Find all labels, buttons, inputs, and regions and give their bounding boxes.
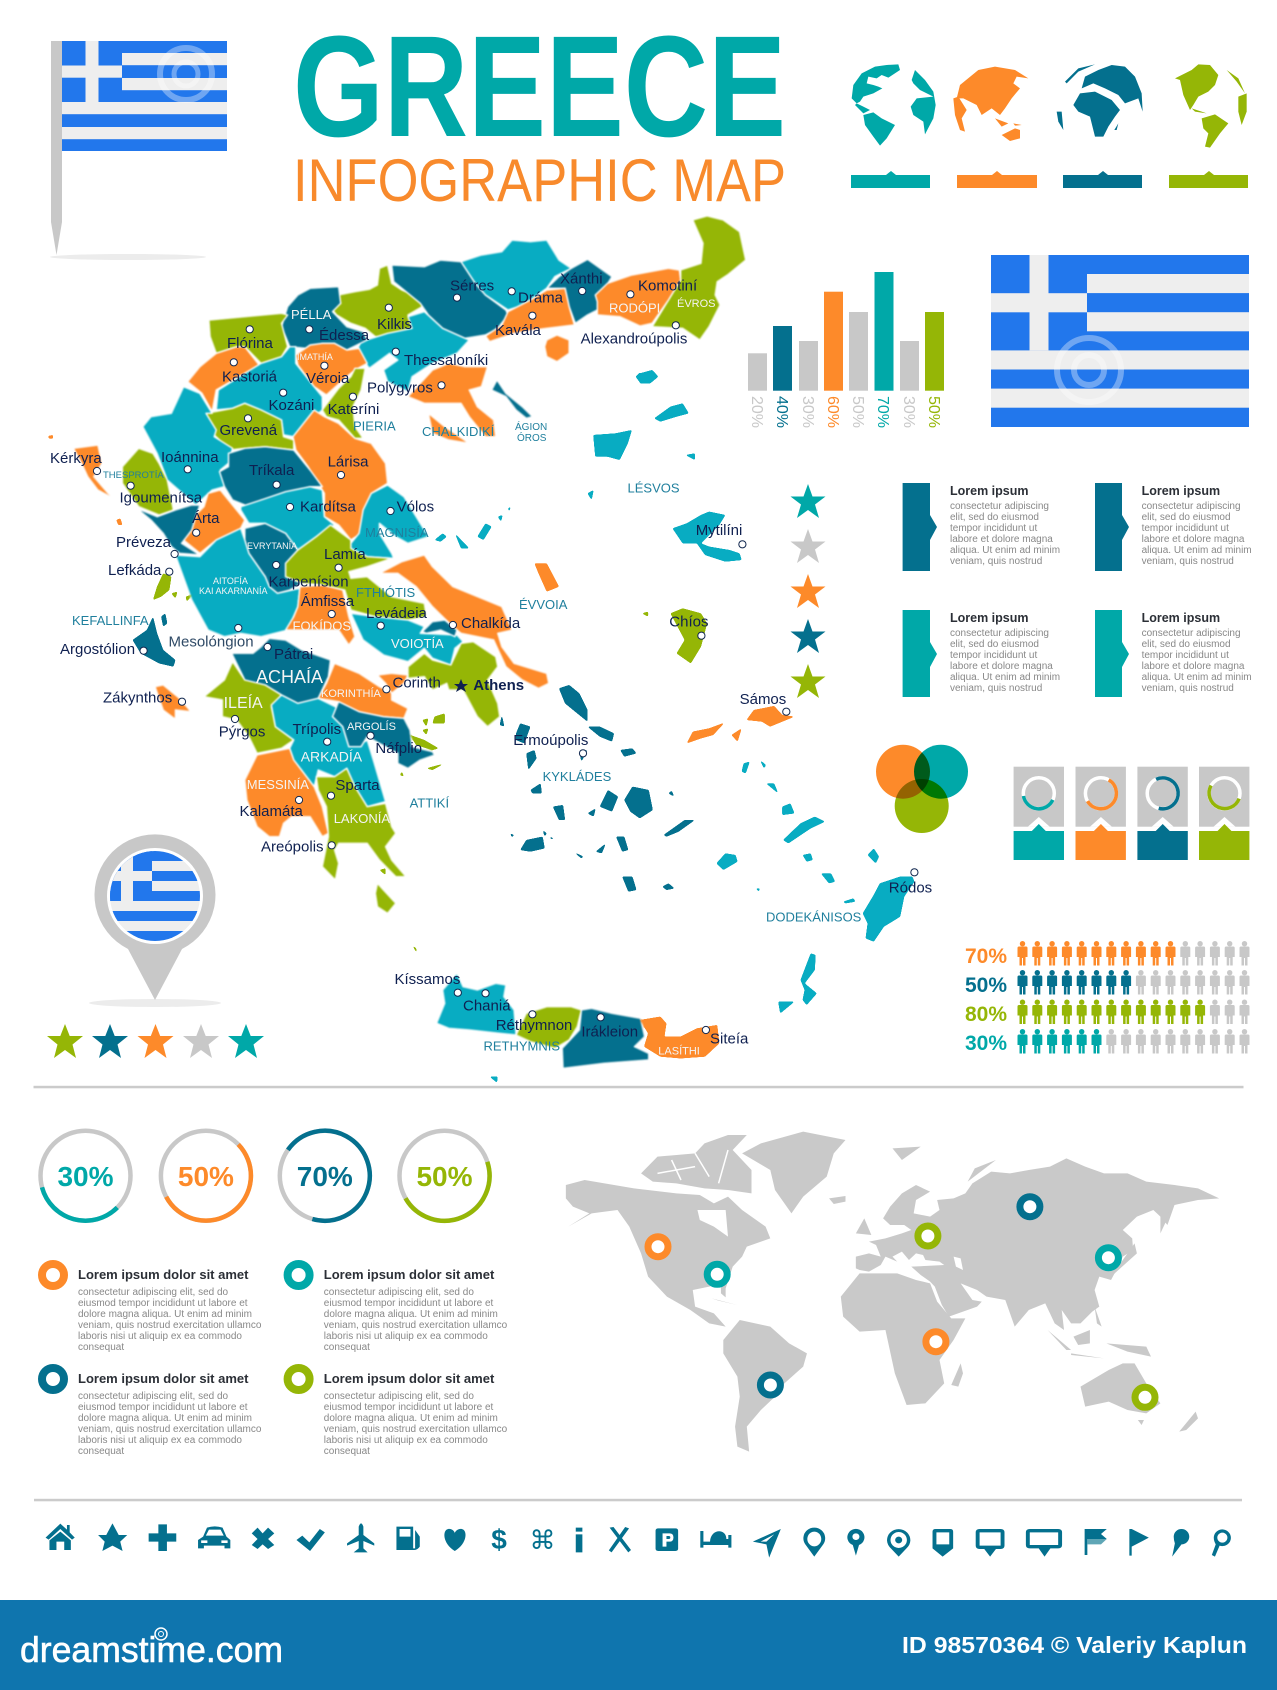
city labels: Ioánnina bbox=[161, 449, 219, 466]
icon: home bbox=[46, 1524, 75, 1550]
legend block green: consequat bbox=[324, 1446, 370, 1457]
region labels white: ACHAÍA bbox=[256, 667, 323, 687]
bar labels: 30% bbox=[900, 396, 917, 428]
region labels teal: ATTIKÍ bbox=[410, 796, 449, 811]
city labels: Árta bbox=[192, 510, 220, 527]
city labels: Sámos bbox=[740, 691, 786, 708]
continents bbox=[566, 1132, 1219, 1452]
world markers bbox=[648, 1197, 1155, 1407]
bar labels: 40% bbox=[773, 396, 790, 428]
region labels teal: KYKLÁDES bbox=[543, 769, 612, 784]
panel: lorem ipsum 3: Lorem ipsum bbox=[950, 611, 1028, 625]
panel: lorem ipsum 1: veniam, quis nostrud bbox=[950, 556, 1042, 567]
globe teal bbox=[852, 64, 936, 146]
legend block dark: veniam, quis nostrud exercitation ullamco bbox=[78, 1424, 262, 1435]
region labels teal: MAGNISÍA bbox=[365, 525, 429, 540]
icon: heart bbox=[444, 1529, 466, 1551]
donut 50% green bbox=[400, 1131, 490, 1221]
icon: navigation arrow bbox=[753, 1529, 781, 1558]
region labels teal: KEFALLINFA bbox=[72, 613, 149, 628]
city labels: Trípolis bbox=[292, 721, 341, 738]
icon: fork and knife bbox=[609, 1527, 631, 1552]
row 70% bbox=[965, 941, 1250, 968]
panel: lorem ipsum 3: tempor incididunt ut bbox=[950, 650, 1037, 661]
region labels teal bbox=[72, 419, 862, 1054]
panel: lorem ipsum 1 bbox=[903, 483, 1060, 571]
bar labels: 60% bbox=[824, 396, 841, 428]
icon: pennant bbox=[1129, 1529, 1149, 1556]
card green bbox=[1199, 767, 1249, 860]
city labels: Athens bbox=[473, 677, 524, 694]
panel: lorem ipsum 1: tempor incididunt ut bbox=[950, 523, 1037, 534]
region labels small white bbox=[199, 352, 396, 733]
ring cards bbox=[1014, 767, 1249, 860]
five stars bottom left bbox=[47, 1024, 264, 1058]
city labels: Náfplio bbox=[375, 740, 422, 757]
legend block orange: laboris nisi ut aliquip ex ea commodo bbox=[78, 1331, 242, 1342]
city labels: Pátrai bbox=[274, 646, 313, 663]
region labels small white: ARGOLÍS bbox=[347, 720, 396, 733]
region labels small white: AITOFÍA bbox=[213, 576, 248, 586]
panel: lorem ipsum 4: veniam, quis nostrud bbox=[1142, 683, 1234, 694]
panel: lorem ipsum 3: consectetur adipiscing bbox=[950, 628, 1049, 639]
city labels: Mytilíni bbox=[696, 522, 742, 539]
card orange bbox=[1076, 767, 1126, 860]
city labels: Kozáni bbox=[268, 397, 314, 414]
panel: lorem ipsum 2: veniam, quis nostrud bbox=[1142, 556, 1234, 567]
row 30% bbox=[965, 1029, 1250, 1055]
panel: lorem ipsum 2: consectetur adipiscing bbox=[1142, 501, 1241, 512]
icon: info bbox=[576, 1528, 582, 1552]
donut 50% orange bbox=[161, 1131, 251, 1221]
region labels small white: IMATHÍA bbox=[297, 352, 333, 362]
panel: lorem ipsum 1: labore et dolore magna bbox=[950, 534, 1053, 545]
icon: flag bbox=[1085, 1529, 1107, 1555]
row 50% bbox=[965, 970, 1250, 997]
city markers bbox=[93, 287, 918, 1034]
city labels: Ámfissa bbox=[301, 593, 355, 610]
legend block green: veniam, quis nostrud exercitation ullamco bbox=[324, 1424, 508, 1435]
city labels: Levádeia bbox=[366, 605, 428, 622]
panel: lorem ipsum 4: aliqua. Ut enim ad minim bbox=[1142, 672, 1252, 683]
land masses bbox=[48, 216, 1055, 1083]
row 80% bbox=[965, 1000, 1250, 1026]
city labels: Lamía bbox=[324, 546, 366, 563]
peloponnese bbox=[155, 638, 500, 913]
city labels: Vólos bbox=[397, 499, 434, 516]
card dark bbox=[1137, 767, 1188, 860]
icon: bed bbox=[700, 1531, 731, 1548]
row 50%: 50% bbox=[965, 974, 1007, 997]
title: GREECE bbox=[293, 6, 786, 167]
bar labels: 50% bbox=[925, 396, 942, 428]
legend block teal: laboris nisi ut aliquip ex ea commodo bbox=[324, 1331, 488, 1342]
legend block teal: dolore magna aliqua. Ut enim ad minim bbox=[324, 1309, 498, 1320]
legend block teal: Lorem ipsum dolor sit amet bbox=[324, 1267, 495, 1282]
title bbox=[293, 6, 786, 214]
city labels: Édessa bbox=[319, 327, 370, 344]
city labels: Kavála bbox=[495, 322, 542, 339]
legend block teal: consectetur adipiscing elit, sed do bbox=[324, 1287, 474, 1298]
city labels: Igoumenítsa bbox=[120, 490, 203, 507]
city labels: Préveza bbox=[116, 534, 172, 551]
people percentage chart bbox=[965, 941, 1250, 1055]
icon: small pin bbox=[847, 1529, 864, 1556]
legend block orange: eiusmod tempor incididunt ut labore et bbox=[78, 1298, 248, 1309]
icon: plus bbox=[149, 1524, 176, 1551]
city labels: Polýgyros bbox=[367, 380, 433, 397]
large flag bbox=[991, 255, 1249, 427]
globe green bbox=[1175, 64, 1247, 148]
dodecanese islands bbox=[640, 706, 1055, 1058]
icon: star bbox=[98, 1523, 127, 1551]
region labels white: ARKADÍA bbox=[301, 749, 363, 765]
legend block green: laboris nisi ut aliquip ex ea commodo bbox=[324, 1435, 488, 1446]
footer band bbox=[0, 1600, 1277, 1690]
region labels white: LAKONÍA bbox=[334, 811, 390, 826]
world map bbox=[566, 1132, 1219, 1452]
location pin with flag bbox=[89, 834, 221, 1007]
region labels teal: CHALKIDIKÍ bbox=[422, 424, 495, 439]
icon: wide bubble pin bbox=[1026, 1529, 1062, 1557]
icon: square pin bbox=[933, 1529, 953, 1557]
region labels white: MESSINÍA bbox=[247, 777, 309, 792]
city labels: Kateríni bbox=[328, 401, 379, 418]
panel: lorem ipsum 4: Lorem ipsum bbox=[1142, 611, 1220, 625]
city labels: Kérkyra bbox=[50, 450, 102, 467]
panel: lorem ipsum 3: labore et dolore magna bbox=[950, 661, 1053, 672]
region labels white: RODÓPI bbox=[609, 301, 660, 316]
icon: command: ⌘ bbox=[530, 1526, 556, 1556]
city labels: Chíos bbox=[669, 614, 708, 631]
city labels: Tríkala bbox=[249, 462, 295, 479]
city labels: Argostólion bbox=[60, 641, 135, 658]
region labels teal: ÉVVOIA bbox=[519, 597, 568, 612]
panel: lorem ipsum 4: consectetur adipiscing bbox=[1142, 628, 1241, 639]
icon: dollar: $ bbox=[491, 1524, 507, 1555]
bar labels bbox=[748, 396, 942, 428]
legend block dark: laboris nisi ut aliquip ex ea commodo bbox=[78, 1435, 242, 1446]
legend block dark: dolore magna aliqua. Ut enim ad minim bbox=[78, 1413, 252, 1424]
city labels: Corinth bbox=[392, 675, 441, 692]
icon: athens star bbox=[454, 679, 468, 692]
city labels: Kilkis bbox=[377, 316, 412, 333]
legend block green: Lorem ipsum dolor sit amet bbox=[324, 1371, 495, 1386]
donut 50% green: 50% bbox=[416, 1161, 473, 1192]
legend block orange: veniam, quis nostrud exercitation ullamco bbox=[78, 1320, 262, 1331]
icon: ring pin bbox=[803, 1528, 825, 1557]
icon: plane bbox=[347, 1523, 374, 1552]
city labels: Pýrgos bbox=[219, 724, 265, 741]
legend block teal bbox=[288, 1264, 508, 1353]
region labels white: ILEÍA bbox=[224, 693, 263, 712]
icon: fuel bbox=[396, 1527, 420, 1550]
eastern aegean islands bbox=[593, 370, 742, 663]
city labels: Ermoúpolis bbox=[513, 732, 588, 749]
icon: tilted pin bbox=[1172, 1529, 1189, 1557]
donut 70% bbox=[280, 1131, 370, 1221]
donut 50% orange: 50% bbox=[178, 1161, 234, 1192]
panel: lorem ipsum 4: labore et dolore magna bbox=[1142, 661, 1245, 672]
city labels: Mesolóngion bbox=[168, 634, 254, 651]
icons left half bbox=[46, 1523, 631, 1552]
region labels teal: DODEKÁNISOS bbox=[766, 910, 862, 925]
region labels teal: ÁGION bbox=[515, 420, 547, 433]
region labels white: FOKÍDOS bbox=[292, 619, 351, 634]
panel: lorem ipsum 1: aliqua. Ut enim ad minim bbox=[950, 545, 1060, 556]
city labels: Komotiní bbox=[638, 278, 698, 295]
city labels: Lárisa bbox=[328, 454, 369, 471]
city labels: Areópolis bbox=[261, 839, 324, 856]
panel: lorem ipsum 2: Lorem ipsum bbox=[1142, 484, 1220, 498]
region labels small white: EVRYTANÍA bbox=[247, 541, 297, 551]
city labels: Lefkáda bbox=[108, 562, 162, 579]
row 30%: 30% bbox=[965, 1032, 1007, 1055]
city labels: Xánthi bbox=[560, 270, 603, 287]
region labels teal: ÓROS bbox=[517, 431, 547, 444]
region labels white: LASÍTHI bbox=[658, 1044, 700, 1057]
city labels: Thessaloníki bbox=[404, 352, 488, 369]
city labels bbox=[50, 270, 932, 1047]
city labels: Irákleion bbox=[581, 1024, 638, 1041]
region labels white: PÉLLA bbox=[291, 307, 332, 322]
icon: cross bbox=[252, 1528, 274, 1549]
icons right half bbox=[656, 1528, 1231, 1558]
panel: lorem ipsum 2: tempor incididunt ut bbox=[1142, 523, 1229, 534]
icon: target pin bbox=[887, 1529, 910, 1557]
title: INFOGRAPHIC MAP bbox=[293, 147, 786, 214]
flag on pole bbox=[50, 41, 227, 260]
city labels: Kastoriá bbox=[222, 369, 278, 386]
panel: lorem ipsum 2: elit, sed do eiusmod bbox=[1142, 512, 1231, 523]
donut 70%: 70% bbox=[297, 1161, 353, 1192]
city labels: Siteía bbox=[710, 1030, 749, 1047]
panel: lorem ipsum 1: consectetur adipiscing bbox=[950, 501, 1049, 512]
region labels teal: PIERIA bbox=[353, 419, 396, 434]
icon: bubble pin bbox=[976, 1529, 1004, 1557]
legend block dark: consectetur adipiscing elit, sed do bbox=[78, 1391, 229, 1402]
donut 30% bbox=[40, 1131, 130, 1221]
venn diagram bbox=[876, 745, 968, 833]
legend block orange: Lorem ipsum dolor sit amet bbox=[78, 1267, 249, 1282]
icon: check bbox=[296, 1529, 325, 1551]
crete bbox=[437, 973, 649, 1068]
panel: lorem ipsum 1: elit, sed do eiusmod bbox=[950, 512, 1039, 523]
bar labels: 30% bbox=[799, 396, 816, 428]
donut charts bbox=[40, 1131, 490, 1221]
rodopi and evros bbox=[595, 216, 746, 340]
city labels: Véroia bbox=[306, 370, 350, 387]
legend block teal: consequat bbox=[324, 1342, 370, 1353]
region labels small white: KORINTHÍA bbox=[321, 687, 382, 700]
legend block green: dolore magna aliqua. Ut enim ad minim bbox=[324, 1413, 498, 1424]
legend block teal: veniam, quis nostrud exercitation ullamco bbox=[324, 1320, 508, 1331]
credit: ID 98570364 © Valeriy Kaplun bbox=[902, 1632, 1247, 1658]
icon: car bbox=[198, 1526, 230, 1548]
panel: lorem ipsum 2: labore et dolore magna bbox=[1142, 534, 1245, 545]
panel: lorem ipsum 2: aliqua. Ut enim ad minim bbox=[1142, 545, 1252, 556]
city labels: Sérres bbox=[450, 278, 494, 295]
legend block dark bbox=[42, 1368, 262, 1457]
city labels: Flórina bbox=[227, 335, 274, 352]
city labels: Sparta bbox=[335, 777, 380, 794]
globe dark bbox=[1057, 64, 1143, 137]
ionian and aegean islands north bbox=[48, 373, 649, 667]
city labels: Dráma bbox=[518, 290, 564, 307]
row 80%: 80% bbox=[965, 1003, 1007, 1026]
logo: dreamstime.com bbox=[20, 1629, 283, 1670]
legend block orange bbox=[42, 1264, 262, 1353]
panel: lorem ipsum 4: elit, sed do eiusmod bbox=[1142, 639, 1231, 650]
card teal bbox=[1014, 767, 1064, 860]
city labels: Zákynthos bbox=[103, 690, 172, 707]
panel: lorem ipsum 3 bbox=[903, 610, 1060, 697]
region labels white: VOIOTÍA bbox=[391, 636, 444, 651]
donut 30%: 30% bbox=[57, 1161, 114, 1192]
city labels: Chalkída bbox=[461, 615, 521, 632]
regions north and central bbox=[73, 240, 612, 688]
legend block dark: consequat bbox=[78, 1446, 124, 1457]
icon: parking bbox=[656, 1528, 678, 1551]
globes bbox=[852, 64, 1247, 148]
city labels: Grevená bbox=[220, 422, 278, 439]
column of stars bbox=[790, 484, 826, 698]
city labels: Ródos bbox=[889, 880, 932, 897]
region labels teal: FTHIÓTIS bbox=[356, 585, 416, 600]
legend block orange: consectetur adipiscing elit, sed do bbox=[78, 1287, 229, 1298]
legend block green bbox=[288, 1368, 508, 1457]
panel: lorem ipsum 3: aliqua. Ut enim ad minim bbox=[950, 672, 1060, 683]
legend block orange: dolore magna aliqua. Ut enim ad minim bbox=[78, 1309, 252, 1320]
panel: lorem ipsum 4: tempor incididunt ut bbox=[1142, 650, 1229, 661]
cyclades and saronic islands bbox=[379, 685, 653, 1083]
region labels small white: KAI AKARNANÍA bbox=[199, 586, 268, 596]
panel: lorem ipsum 3: elit, sed do eiusmod bbox=[950, 639, 1039, 650]
bar chart bbox=[748, 272, 944, 428]
city labels: Chaniá bbox=[463, 998, 511, 1015]
region labels white: ÉVROS bbox=[677, 297, 716, 310]
row 70%: 70% bbox=[965, 945, 1007, 968]
panel: lorem ipsum 2 bbox=[1095, 483, 1252, 571]
panel: lorem ipsum 4 bbox=[1095, 610, 1252, 697]
city labels: Kalamáta bbox=[240, 803, 304, 820]
city labels: Kardítsa bbox=[300, 499, 357, 516]
city labels: Réthymnon bbox=[496, 1017, 572, 1034]
city labels: Kíssamos bbox=[394, 971, 460, 988]
panel: lorem ipsum 3: veniam, quis nostrud bbox=[950, 683, 1042, 694]
region labels teal: THESPROTÍA bbox=[103, 470, 164, 481]
legend block dark: Lorem ipsum dolor sit amet bbox=[78, 1371, 249, 1386]
bar labels: 20% bbox=[748, 396, 765, 428]
city labels: Karpenísion bbox=[268, 574, 349, 591]
region labels teal: RETHYMNIS bbox=[484, 1039, 560, 1054]
panel: lorem ipsum 1: Lorem ipsum bbox=[950, 484, 1028, 498]
legend block green: consectetur adipiscing elit, sed do bbox=[324, 1391, 474, 1402]
icon row bbox=[46, 1523, 1231, 1558]
legend block dark: eiusmod tempor incididunt ut labore et bbox=[78, 1402, 248, 1413]
globe ribbons bbox=[851, 171, 1248, 188]
bar labels: 70% bbox=[874, 396, 891, 428]
bar labels: 50% bbox=[849, 396, 866, 428]
icon: tilted ring pin bbox=[1212, 1529, 1231, 1557]
icon: flag lower band bbox=[1087, 1539, 1107, 1544]
map of Greece bbox=[48, 216, 1055, 1083]
legend block teal: eiusmod tempor incididunt ut labore et bbox=[324, 1298, 494, 1309]
legend block green: eiusmod tempor incididunt ut labore et bbox=[324, 1402, 494, 1413]
globe orange bbox=[953, 67, 1028, 141]
region labels white bbox=[224, 297, 716, 1057]
legend block orange: consequat bbox=[78, 1342, 124, 1353]
region labels teal: LÉSVOS bbox=[628, 481, 680, 496]
city labels: Alexandroúpolis bbox=[581, 330, 687, 347]
